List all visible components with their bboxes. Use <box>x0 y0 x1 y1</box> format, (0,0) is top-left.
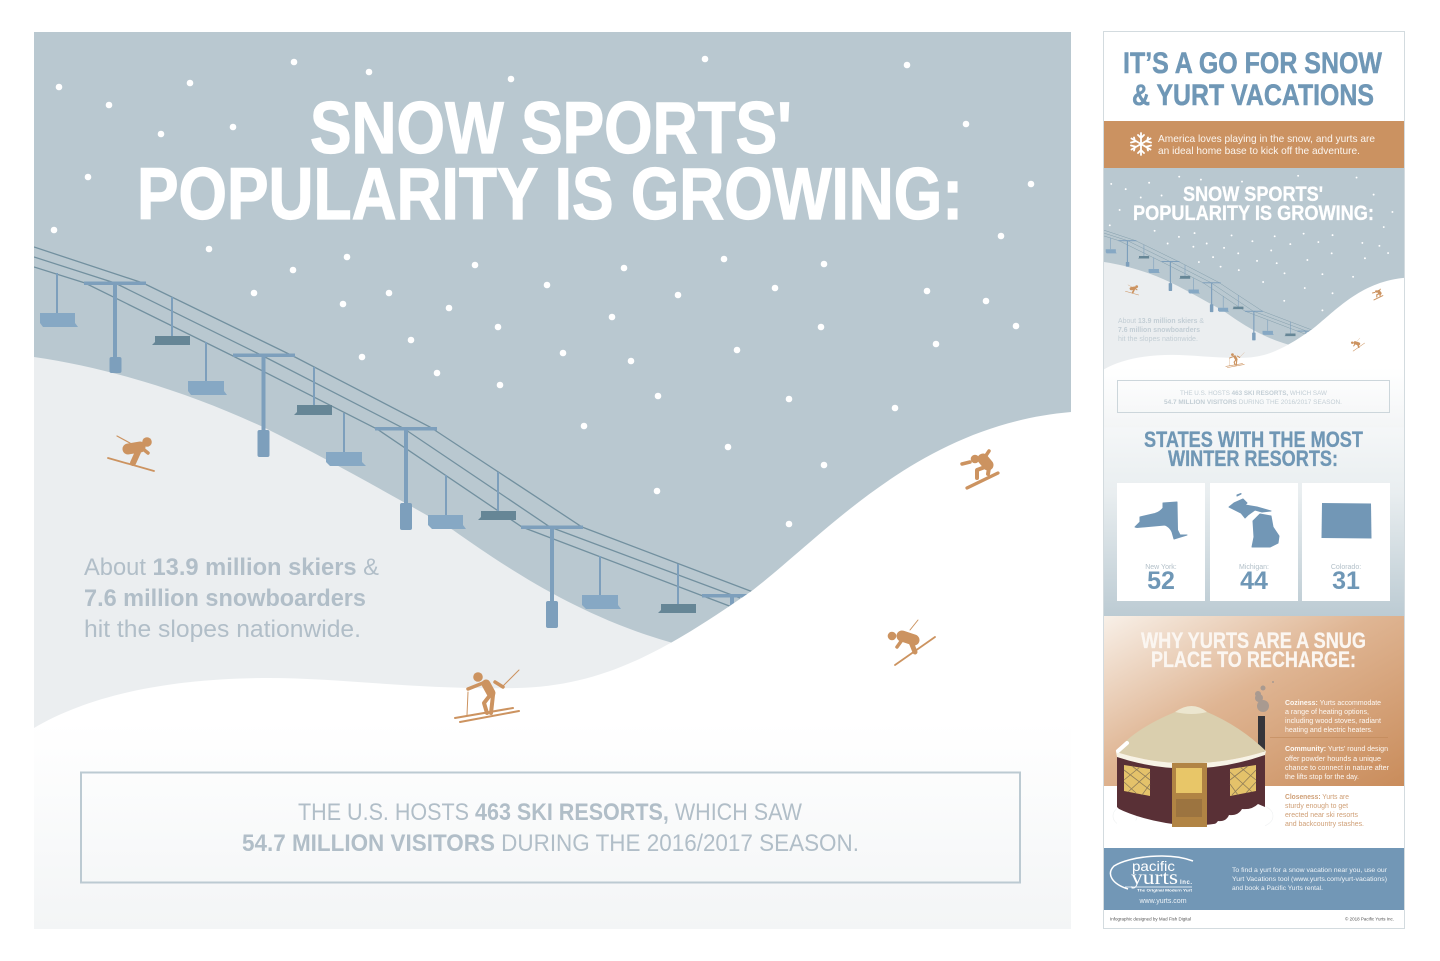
logo: Pacific Yurts: yurts <box>1131 867 1178 889</box>
callout: ski resorts small <box>1118 380 1390 412</box>
panel: why yurts <box>1104 616 1404 848</box>
callout: ski resorts box <box>81 772 1020 882</box>
text: closeness <box>1285 794 1364 828</box>
text: community: the lifts stop for the day. <box>1285 774 1359 781</box>
text: closeness: sturdy enough to get <box>1285 803 1348 810</box>
card: Colorado: 31 <box>1332 567 1360 595</box>
heading: go for snow and yurt vacations <box>1123 47 1383 112</box>
text: coziness: heating and electric heaters. <box>1285 727 1373 734</box>
card: New York: New York: <box>1145 564 1177 571</box>
card: Michigan: 44 <box>1240 567 1268 595</box>
panel: full infographic thumbnail <box>1104 32 1404 928</box>
logo: Pacific Yurts: The Original Modern Yurt <box>1137 888 1193 892</box>
heading: snow sports popularity small <box>1133 183 1374 225</box>
text: closeness: erected near ski resorts <box>1285 812 1358 819</box>
text: coziness: a range of heating options, <box>1285 709 1369 716</box>
callout: ski resorts small: 54.7 MILLION VISITORS DURING THE 2016/2017 SEASON. <box>1164 399 1342 406</box>
text: find a yurt: To find a yurt for a snow vacation near you, use our <box>1232 867 1388 874</box>
icon: Colorado state <box>1322 503 1372 538</box>
text: skier statistics small: hit the slopes nationwide. <box>1118 336 1198 343</box>
intro text: an ideal home base to kick off the adventure. <box>1158 145 1360 157</box>
text: skier statistics small <box>1118 318 1204 343</box>
text: skier statistics small: 7.6 million snowboarders <box>1118 327 1200 334</box>
text: coziness <box>1285 700 1381 734</box>
intro text <box>1158 133 1375 157</box>
icon: Michigan state <box>1229 494 1279 547</box>
icon: New York state <box>1135 502 1187 539</box>
heading: go for snow and yurt vacations: & YURT VACATIONS <box>1132 79 1374 112</box>
heading: snow sports popularity <box>137 88 963 235</box>
text: find a yurt: Yurt Vacations tool (www.yurts.com/yurt-vacations) <box>1232 876 1387 883</box>
snowy slope scene with chairlift and skiers <box>34 32 1071 929</box>
footer band <box>1104 848 1404 910</box>
text: find a yurt: and book a Pacific Yurts rental. <box>1232 885 1323 892</box>
card: Colorado <box>1302 483 1390 601</box>
heading: snow sports popularity: SNOW SPORTS' <box>310 88 792 169</box>
credits: © 2018 Pacific Yurts Inc. <box>1345 916 1394 922</box>
heading: why yurts: WHY YURTS ARE A SNUG <box>1141 628 1366 653</box>
text: skier statistics: 7.6 million snowboarders <box>84 585 366 612</box>
text: coziness: including wood stoves, radiant <box>1285 718 1381 725</box>
text: find a yurt <box>1232 867 1388 892</box>
card: New York <box>1117 483 1205 601</box>
intro text: America loves playing in the snow, and yurts are <box>1158 133 1375 145</box>
credits <box>1110 916 1394 922</box>
callout: ski resorts small: THE U.S. HOSTS 463 SKI RESORTS, WHICH SAW <box>1180 390 1328 397</box>
heading: states with most winter resorts: WINTER RESORTS: <box>1168 446 1338 471</box>
heading: states with most winter resorts: STATES WITH THE MOST <box>1144 427 1363 452</box>
intro band <box>1104 121 1404 168</box>
text: skier statistics: hit the slopes nationwide. <box>84 616 361 643</box>
text: coziness: Coziness: Yurts accommodate <box>1285 700 1381 707</box>
text: community <box>1285 746 1390 781</box>
heading: snow sports popularity: POPULARITY IS GROWING: <box>137 154 963 235</box>
heading: why yurts: PLACE TO RECHARGE: <box>1151 647 1356 672</box>
heading: go for snow and yurt vacations: IT’S A GO FOR SNOW <box>1123 47 1383 80</box>
heading: states with most winter resorts <box>1144 427 1363 471</box>
card: Colorado: Colorado: <box>1331 564 1361 571</box>
panel: snow sports illustration <box>34 32 1071 929</box>
text: skier statistics: About 13.9 million skiers & <box>84 554 379 581</box>
credits: Infographic designed by Mad Fish Digital <box>1110 916 1191 922</box>
text: closeness: and backcountry stashes. <box>1285 821 1364 828</box>
text: skier statistics small: About 13.9 million skiers & <box>1118 318 1204 325</box>
text: closeness: Closeness: Yurts are <box>1285 794 1349 801</box>
text: community: offer powder hounds a unique <box>1285 756 1381 763</box>
logo: Pacific Yurts: pacific <box>1132 858 1175 874</box>
lower background gradient <box>1104 426 1404 616</box>
logo: Pacific Yurts: www.yurts.com <box>1138 898 1187 905</box>
callout: ski resorts box: 54.7 MILLION VISITORS DURING THE 2016/2017 SEASON. <box>242 830 859 857</box>
heading: snow sports popularity small: POPULARITY IS GROWING: <box>1133 202 1374 225</box>
callout: ski resorts box: THE U.S. HOSTS 463 SKI RESORTS, WHICH SAW <box>298 799 802 826</box>
text: community: Community: Yurts' round design <box>1285 746 1388 753</box>
thumbnail scene <box>1104 168 1404 428</box>
card: Michigan <box>1210 483 1298 601</box>
card: New York: 52 <box>1147 567 1175 595</box>
icon: yurt <box>1113 681 1274 830</box>
logo: Pacific Yurts: Inc. <box>1180 880 1192 886</box>
card: Michigan: Michigan: <box>1239 564 1269 571</box>
heading: why yurts <box>1141 628 1366 672</box>
heading: snow sports popularity small: SNOW SPORTS' <box>1183 183 1323 206</box>
text: community: chance to connect in nature after <box>1285 765 1390 772</box>
logo: Pacific Yurts <box>1110 856 1193 905</box>
text: skier statistics <box>84 554 379 643</box>
icon: snowflake <box>1131 133 1151 155</box>
